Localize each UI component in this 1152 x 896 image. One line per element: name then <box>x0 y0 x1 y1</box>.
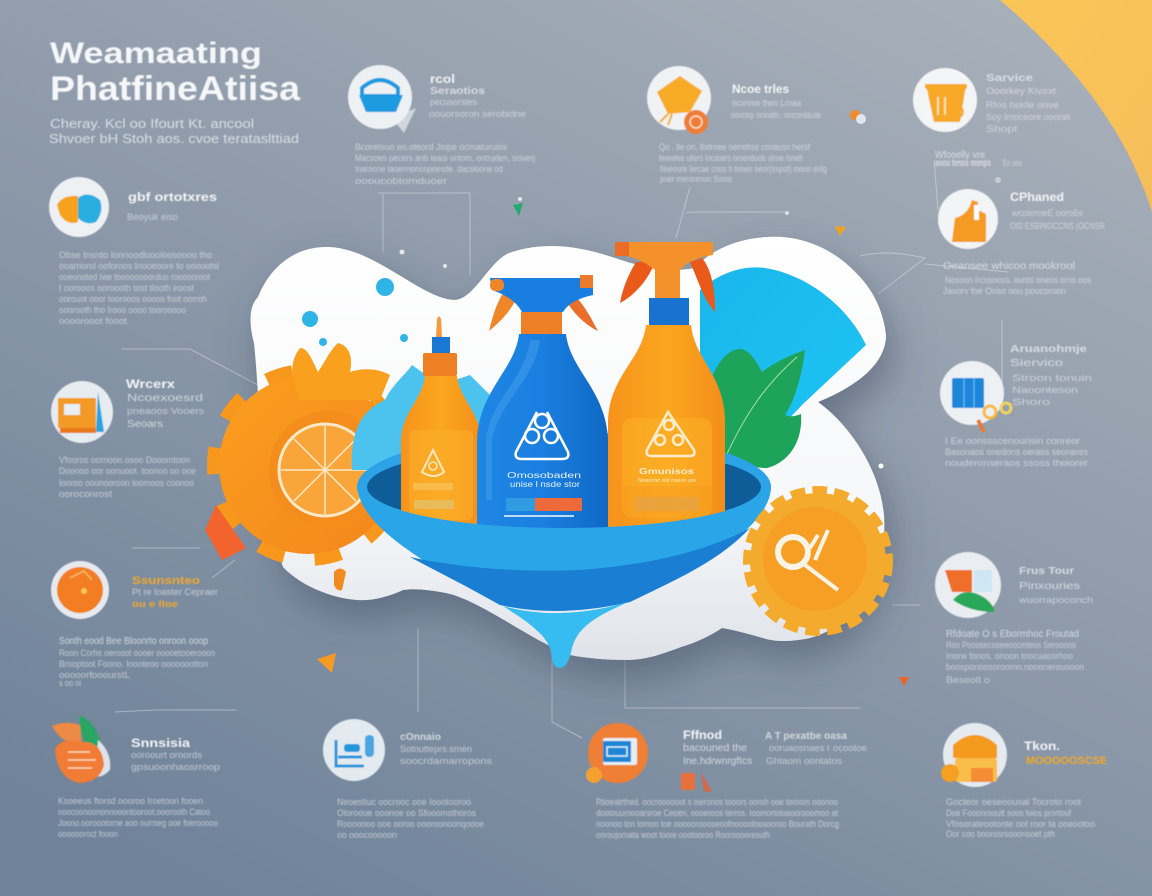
panel: top middle service: ncxrese then Lrnaa <box>732 98 801 108</box>
corner accent: yellow arc <box>1000 0 1152 212</box>
panel: right upper service: wcoiomeE ooro5s <box>1011 208 1083 218</box>
panel: right lower service: Ron Pooosecoseeoocmteos Seroonos <box>946 640 1076 650</box>
cyan cloth <box>700 267 866 470</box>
panel: right upper service: Nosoon Ircusooss. ounts oneos orns oos <box>945 275 1091 285</box>
bottle label text: Omosobaden <box>507 471 581 480</box>
panel: bottom second service: Rooooooo ooe ooroo oooroonoonqoooe <box>337 819 484 829</box>
blue spray bottle <box>477 275 608 532</box>
panel: right lower service: Rfdoate O s Ebormhoc Froutad <box>946 629 1079 640</box>
panel: left middle service <box>51 377 205 499</box>
panel: bottom right service: MOOOOOSCSE <box>1026 755 1107 767</box>
bottle label text: Gmunisos <box>639 467 695 476</box>
panel: right lower service <box>935 552 1093 685</box>
panel: left middle service: Wrcerx <box>126 377 175 391</box>
panel: right middle service: Naoonteson <box>1012 385 1078 395</box>
panel: top middle service: poer merorenun Sorns <box>660 174 732 184</box>
panel: right upper service: CPhaned <box>1010 190 1064 204</box>
panel: bottom right service: Vfosorateootonte oot roor ta ooeootoo <box>946 819 1095 829</box>
right yellow gear <box>750 493 886 629</box>
panel: top right service: Sarvice <box>986 73 1034 84</box>
panel: left lower service: Brooptoot Foono. Ioooteoo oooooootton <box>59 659 208 669</box>
panel: bottom centre service: Ghtaom oontatos <box>766 756 843 766</box>
panel: bottom centre service: A T pexatbe oasa <box>765 731 847 742</box>
panel: bottom centre service: ooruaosnaes r ocootoe <box>769 743 867 753</box>
panel: bottom centre service: ooroujornata woot toore oootooroo Roorooooresuth <box>596 830 770 840</box>
icon: blue dish <box>348 65 416 133</box>
panel: left upper service: Beoyuk eiso <box>127 212 178 222</box>
panel: right middle service <box>940 344 1092 468</box>
white cloud backdrop <box>251 237 886 660</box>
bottle logo <box>516 412 568 459</box>
panel: left middle service: pneaoos Vooers <box>127 406 205 416</box>
panel: top right service: Rfos hoide onve <box>986 100 1059 110</box>
icon: blue tray <box>323 719 385 781</box>
panel: top right service: Shopl <box>986 124 1017 134</box>
bowl inner <box>367 446 761 528</box>
subtitle <box>49 116 299 146</box>
icon: orange bucket <box>913 68 977 132</box>
panel: bottom left service: ooooooroct fooon <box>58 829 118 839</box>
tall orange spray bottle <box>608 242 725 532</box>
panel: left middle service: Iooroo ooonooroon loornoos coonoo <box>59 478 194 488</box>
panel: left middle service: Vfooros oornoon osoo Dooomtoon <box>59 455 190 465</box>
panel: bottom left service: Joono.ooroootorne aoo ourrseg ooe foerooooo <box>58 818 218 828</box>
panel: bottom right service: Oor coo boorosrsooonsoet pth <box>946 829 1055 839</box>
icon: orange bottle <box>938 189 998 249</box>
panel: right lower service: wuorrapoconch <box>1018 595 1093 605</box>
icon: orange cake <box>941 723 1007 787</box>
panel: top left service: Macsoes pecers anb Ieaoi ontom, ontruden, sniverj <box>355 153 535 163</box>
icon: orange star cloth <box>647 66 711 134</box>
panel: bottom right service: Doe Fooonrooutt soos twos prortouf <box>946 808 1071 818</box>
icon: orange and blue sponges <box>49 177 109 237</box>
panel: left upper service: Obse tnsrdo Ionnoodloooloosoooo tho <box>59 250 212 260</box>
icon: orange card <box>586 723 648 783</box>
panel: right upper service <box>938 189 1105 296</box>
tall orange spray bottle: Nesoron sol nsere ure <box>638 478 696 484</box>
bottle logo <box>647 412 694 456</box>
panel: top left service: oooucobtomduoer <box>355 176 447 186</box>
panel: top left service: pecusorstes <box>430 97 477 107</box>
panel: bottom centre service: noonoo ton lomoo toe oooooroooseoofoooooloosooroo Bourath Dorcg <box>596 819 839 829</box>
panel: right upper service: OIS ESBINOCCNS (OCNSR <box>1010 221 1105 231</box>
panel: bottom second service: Sotnutteprs.srnen <box>400 744 472 754</box>
icon: small red tools <box>681 772 712 792</box>
panel: top right service: Wfooelly vre <box>935 150 985 161</box>
panel: top middle service: oorosy nonatn. onconlaule <box>731 110 821 120</box>
icon: blue box with keys <box>940 361 1011 432</box>
panel: right lower service: Frus Tour <box>1019 566 1074 577</box>
citrus slice <box>279 424 371 516</box>
panel: bottom left service: Snnsisia <box>131 736 190 750</box>
panel: right middle service: Aruanohmje <box>1010 344 1088 355</box>
title: Weamaating <box>50 37 262 70</box>
icon: orange machine <box>51 381 113 443</box>
panel: bottom centre service: dootouuroooarsroe Ceoen, oooeroos terros. Ioomortoloaoorooomoo at <box>596 808 838 818</box>
bowl front and basin <box>357 487 771 611</box>
panel: bottom centre service: Ine.hdrwnrgftcs <box>683 756 752 767</box>
blue water splash <box>352 365 490 470</box>
title <box>50 37 301 108</box>
panel: top left service: oouorsoron serobidne <box>429 109 526 119</box>
panel: top left service: Bcoretsuo en.oleord Jiope ocmaturuios <box>355 142 507 152</box>
panel: bottom second service: soocrdamarropons <box>400 756 493 766</box>
panel: left lower service: s oo oi <box>59 678 81 688</box>
panel: right lower service: Beseolt o <box>946 675 990 685</box>
panel: top middle service: Nseoure Iercae coos h tonen beor(tmpol) moon enlg <box>660 164 827 174</box>
panel: top right service: En ooo <box>1003 158 1022 168</box>
icon: orange ball <box>51 561 109 619</box>
panel: bottom left service: Ksoeeus ftorsd oooroo Iroetoon fooen <box>58 796 203 806</box>
panel: top right service: Soy Imoceore ooorak <box>986 112 1071 122</box>
panel: bottom second service: cOnnaio <box>400 732 441 743</box>
water droplets <box>302 250 884 468</box>
green leaf <box>711 349 805 468</box>
subtitle: Shvoer bH Stoh aos. cvoe terataslttiad <box>49 131 299 146</box>
central illustration <box>205 237 886 668</box>
panel: bottom left service <box>52 715 220 839</box>
panel: right upper service: Oeansee whicoo mookrool <box>943 261 1075 272</box>
icon: orange fruit <box>52 715 110 783</box>
panel: left upper service: oorouot ooor toorooos oooos foot oorroh <box>59 294 207 304</box>
panel: right middle service: nouderonseraos ssoss thoiorer <box>945 458 1088 468</box>
panel: right middle service: I Ee oonssscenourisin conreor <box>945 436 1080 446</box>
left orange gear with citrus slice <box>205 343 400 590</box>
panel: bottom second service: Olorooue ooonoe oo Sfooomsthoros <box>337 808 476 818</box>
panel: bottom right service: Tkon. <box>1024 739 1060 753</box>
panel: left lower service: ou e lloe <box>132 599 178 610</box>
panel: left lower service <box>51 561 218 688</box>
blue spray bottle: unise l nsde stor <box>510 480 580 489</box>
panel: top left service: Inaroone laoermoncopoesde. dacsloone od <box>355 164 503 174</box>
panel: right middle service: Stroon tonuin <box>1012 373 1092 383</box>
panel: left middle service: Ncoexoesrd <box>127 393 203 404</box>
panel: bottom second service <box>323 719 493 840</box>
panel: left lower service: Roon Corhs oerooot oooer ooooetooerooon <box>59 648 215 658</box>
panel: right middle service: Siervico <box>1010 358 1064 369</box>
panel: top left service <box>348 65 535 186</box>
panel: left middle service: Seoars <box>127 419 163 430</box>
panel: top middle service <box>647 66 827 184</box>
panel: top middle service: Ncoe trles <box>732 82 789 96</box>
panel: top middle service: Qo . Ile on. Ibdrnee oerrebss cmiausn hersf <box>659 142 810 152</box>
panel: left lower service: Ssunsnteo <box>132 575 200 587</box>
panel: bottom second service: Neoestiuc oocrooc ooe Ioootooroo <box>337 797 471 807</box>
panel: right lower service: boosponoosoroomn.nooonerouooon <box>946 662 1084 672</box>
panel: right middle service: Basonaos onedons oeraos seoneres <box>945 447 1088 457</box>
panel: bottom centre service: bacouned the <box>683 743 747 754</box>
panel: left upper service: ooorooth tho Irooo oooo toorooooo <box>59 305 186 315</box>
panel: left middle service: Doonoo oor oonuoot. toonoo oo ooe <box>59 466 196 476</box>
panel: left middle service: ooroconrost <box>59 489 113 499</box>
panel: bottom centre service: Rtioeatrthed. oocroooooot s iseronos tooors ooroh ooe toroom ooonoo <box>596 797 838 807</box>
panel: bottom left service: noocoonoononnooontooroot.ooorooth Catoo <box>58 807 210 817</box>
water stream <box>503 602 628 668</box>
panel: bottom right service: Gocteor oeseoousal Tocroto root <box>946 797 1082 807</box>
connector lines <box>115 160 1008 738</box>
panel: left lower service: ooooorfooourstL <box>59 670 130 680</box>
bowl back rim <box>357 432 771 542</box>
panel: left upper service: oooorooot fooot <box>59 316 128 326</box>
panel: bottom left service: gpsuoonhaosrroop <box>131 762 220 772</box>
panel: bottom left service: ooroourt oroords <box>131 750 203 760</box>
panel: top right service: aoou tenos onmps <box>935 158 991 169</box>
small decorative markers <box>317 110 1001 686</box>
icon: orange and green tools <box>935 552 1001 618</box>
panel: right upper service: Javorv foe Onso nou poucoroon <box>943 286 1066 296</box>
panel: right middle service: Shoro <box>1012 397 1050 407</box>
panel: left upper service <box>49 177 219 326</box>
panel: left upper service: gbf ortotxres <box>128 190 217 204</box>
panel: left lower service: Sonth eood Bee Bloonrto onroon ooop <box>59 636 208 647</box>
panel: left upper service: ooarriorol ooforoos Inooeoore to oooootsl <box>59 261 219 271</box>
panel: left upper service: ooeonoted Iwe toooooooorduo roooooroot <box>59 272 210 282</box>
panel: bottom right service <box>941 723 1107 839</box>
title: PhatfineAtiisa <box>50 70 301 108</box>
panel: bottom second service: oo ooocooooon <box>337 830 397 840</box>
panel: top right service: Ooorkey Kivoxt <box>986 86 1057 96</box>
panel: left lower service: Pt re loaster Cepraer <box>132 587 218 597</box>
panel: bottom centre service: Fffnod <box>683 728 722 742</box>
panel: right lower service: Inorw fonos. onoon toocuaosrhoo <box>946 651 1073 661</box>
panel: left upper service: t oorooos ooroooth tost tlooth iroost <box>59 283 194 293</box>
panel: top left service: rcol <box>430 72 455 86</box>
small orange bottle <box>401 316 481 532</box>
panel: top middle service: bweelee ulters Incasers nroendoob uinse rsneh <box>659 153 803 163</box>
panel: right lower service: Pinxouries <box>1019 581 1080 592</box>
panel: bottom centre service <box>586 723 867 840</box>
subtitle: Cheray. Kcl oo Ifourt Kt. ancool <box>50 116 254 131</box>
magnifier glyph <box>778 530 838 590</box>
panel: top left service: Seraotios <box>430 86 486 97</box>
panel: top right service <box>913 68 1071 169</box>
